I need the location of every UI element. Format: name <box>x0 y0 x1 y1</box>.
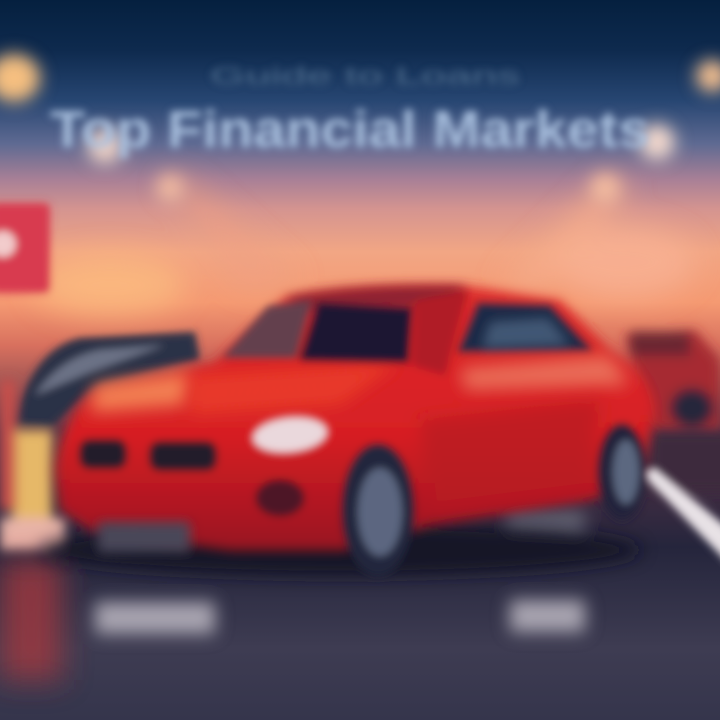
car shadow <box>40 524 640 576</box>
road right of the car <box>650 432 720 492</box>
horizon glow <box>35 175 695 315</box>
rear side window <box>458 303 592 352</box>
red sign at left <box>0 203 50 293</box>
background car right <box>625 330 720 430</box>
grille <box>80 440 216 470</box>
road stripe <box>640 468 720 565</box>
bumper intake <box>256 480 304 516</box>
hood highlight <box>90 372 190 412</box>
front wheel <box>342 444 414 576</box>
car body <box>55 286 655 550</box>
string lights <box>0 54 720 202</box>
main heading: Top Financial Markets <box>50 101 650 159</box>
pillar <box>412 290 468 375</box>
door shade <box>420 400 600 510</box>
cone and post at left <box>0 380 65 550</box>
roof shade <box>285 286 465 310</box>
headlight <box>250 413 330 457</box>
windscreen <box>222 300 312 358</box>
background car left <box>15 332 200 428</box>
road reflections <box>0 560 62 680</box>
rear wheel <box>598 424 646 520</box>
small heading: Guide to Loans <box>210 63 520 90</box>
number plate and lower grille <box>98 522 190 552</box>
door highlight <box>460 355 630 390</box>
red car <box>55 286 655 576</box>
front side window <box>300 303 412 362</box>
